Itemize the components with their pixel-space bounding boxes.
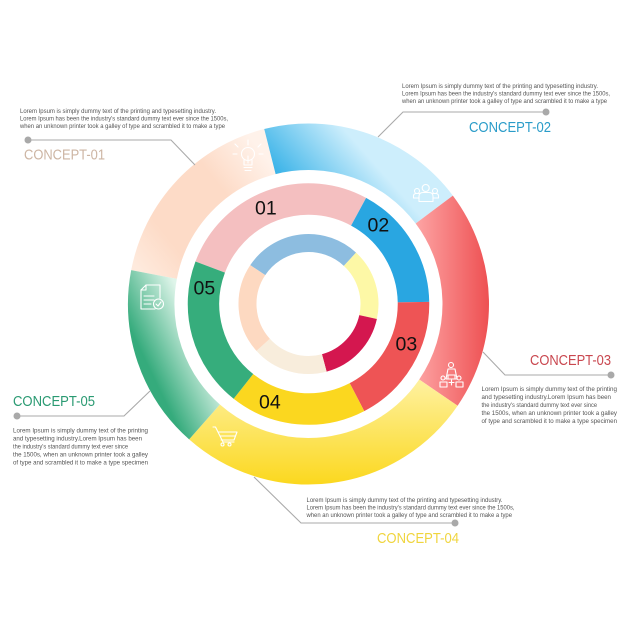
- text 03: the industry's standard dummy text ever since: [482, 402, 598, 409]
- inner segment blue: [258, 243, 350, 270]
- leader line 03: [483, 352, 614, 378]
- heading 04: CONCEPT-04: [377, 531, 459, 547]
- icon: people group: [414, 184, 438, 202]
- text 03: Lorem Ipsum is simply dummy text of the printing: [482, 386, 618, 393]
- text 04: Lorem Ipsum is simply dummy text of the printing and typesetting industry.: [306, 497, 503, 504]
- text 02: when an unknown printer took a galley of type and scrambled it to make a type: [401, 98, 608, 105]
- text 05: the 1500s, when an unknown printer took a galley: [13, 452, 149, 458]
- callout: concept 05: [13, 391, 150, 466]
- text 04: Lorem Ipsum has been the industry's standard dummy text ever since the 1500s,: [306, 504, 515, 512]
- text 02: [401, 83, 610, 105]
- text 02: Lorem Ipsum has been the industry's standard dummy text ever since the 1500s,: [402, 90, 610, 98]
- text 05: the industry's standard dummy text ever since: [13, 444, 128, 450]
- text 05: Lorem Ipsum is simply dummy text of the printing: [13, 428, 149, 434]
- number 03: 03: [396, 334, 417, 356]
- text 05: [13, 428, 149, 466]
- number 01: 01: [255, 198, 277, 220]
- outer ring: [151, 147, 466, 461]
- segment: concept 03: [434, 210, 466, 393]
- text 03: [482, 386, 618, 425]
- text 02: Lorem Ipsum is simply dummy text of the printing and typesetting industry.: [402, 83, 598, 90]
- heading 01: CONCEPT-01: [24, 148, 105, 164]
- text 04: [306, 497, 515, 519]
- icon: light bulb: [233, 140, 263, 170]
- inner segment yellow: [350, 259, 370, 317]
- icon: shopping cart: [213, 427, 237, 446]
- icon: team structure: [440, 362, 463, 387]
- text 03: of type and scrambled it to make a type specimen: [482, 418, 618, 425]
- segment: concept 01: [154, 152, 270, 275]
- callout: concept 01: [19, 108, 228, 165]
- heading 05: CONCEPT-05: [13, 394, 95, 410]
- heading 03: CONCEPT-03: [530, 353, 611, 369]
- segment 03: [357, 302, 413, 397]
- segment 05: [203, 267, 243, 386]
- middle ring: [203, 199, 413, 409]
- text 03: the 1500s, when an unknown printer took a galley: [482, 410, 618, 417]
- leader line 04: [254, 477, 458, 526]
- inner segment crimson: [324, 317, 368, 363]
- segment 01: [210, 199, 359, 267]
- text 04: when an unknown printer took a galley of type and scrambled it to make a type: [306, 512, 513, 519]
- text 03: and typesetting industry.Lorem Ipsum has been: [482, 394, 612, 401]
- number 05: 05: [194, 278, 215, 300]
- inner segment cream: [263, 345, 324, 365]
- callout: concept 03: [482, 352, 618, 425]
- callout: concept 04: [254, 477, 515, 547]
- segment: concept 05: [151, 275, 205, 422]
- text 01: when an unknown printer took a galley of type and scrambled it to make a type: [19, 123, 226, 130]
- leader line 02: [378, 108, 550, 137]
- callout: concept 02: [378, 83, 610, 137]
- leader line 05: [14, 391, 150, 420]
- number 04: 04: [259, 392, 281, 414]
- heading 02: CONCEPT-02: [469, 120, 551, 136]
- icon: document check: [141, 285, 164, 309]
- text 01: Lorem Ipsum is simply dummy text of the printing and typesetting industry.: [20, 108, 216, 115]
- segment: concept 04: [205, 393, 438, 461]
- text 05: of type and scrambled it to make a type specimen: [13, 460, 149, 466]
- segment: concept 02: [270, 147, 434, 210]
- text 05: and typesetting industry.Lorem Ipsum has been: [13, 436, 143, 442]
- number 02: 02: [368, 214, 389, 236]
- segment 04: [243, 386, 357, 409]
- leader line 01: [24, 136, 195, 165]
- text 01: [19, 108, 228, 130]
- text 01: Lorem Ipsum has been the industry's standard dummy text ever since the 1500s,: [20, 116, 228, 122]
- numbers: [194, 198, 417, 414]
- inner segment peach: [248, 270, 263, 345]
- segment 02: [359, 212, 413, 302]
- inner ring: [248, 243, 370, 365]
